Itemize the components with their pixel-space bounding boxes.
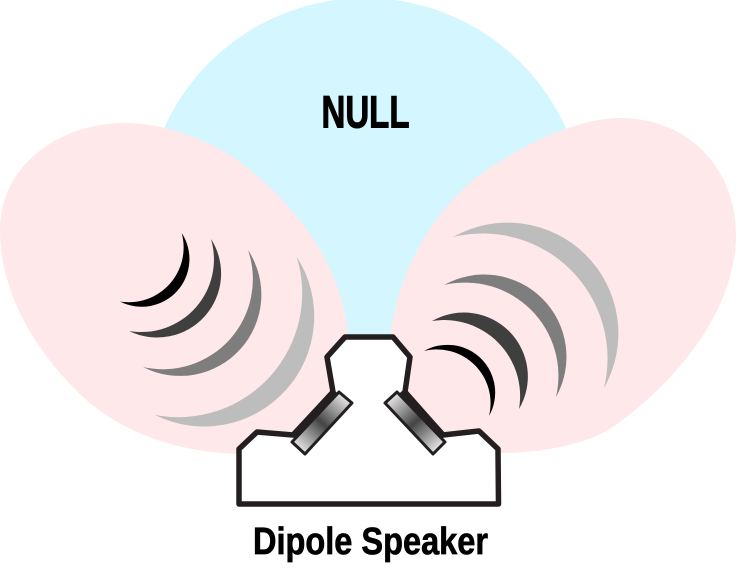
right driver thick edge [402, 391, 444, 437]
heading: NULL: NULL [322, 86, 410, 138]
speaker cabinet [239, 337, 498, 504]
right driver [385, 392, 445, 454]
null lobe: blue [145, 0, 585, 438]
left driver thick edge [293, 391, 335, 437]
left sound waves [120, 233, 314, 426]
left lobe: pink [0, 123, 348, 454]
left driver [292, 392, 352, 454]
right sound waves [424, 223, 618, 416]
right lobe: pink [390, 118, 736, 454]
caption: Dipole Speaker: Dipole Speaker [253, 521, 488, 563]
